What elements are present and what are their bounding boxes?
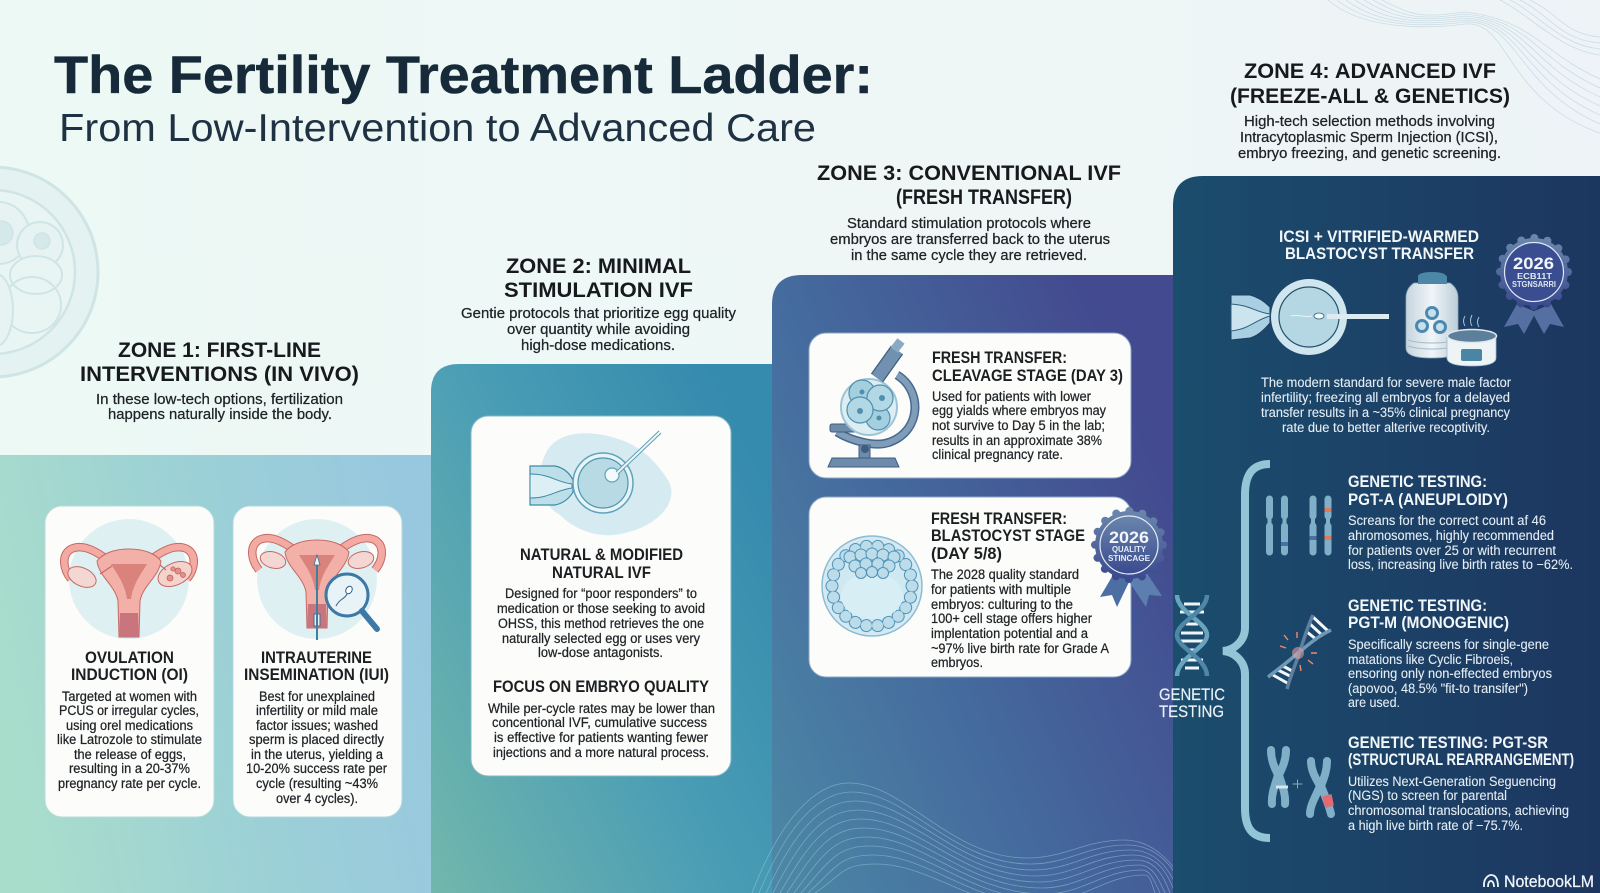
card text [931, 567, 1109, 670]
card text: embryos: culturing to the [931, 597, 1073, 612]
card text [497, 586, 705, 660]
block heading: ICSI transfer: BLASTOCYST TRANSFER [1285, 245, 1474, 263]
card heading: INSEMINATION (IUI) [244, 666, 389, 684]
icon: blastocyst [822, 536, 922, 636]
badge: 2026 standard: 2026 [1513, 254, 1554, 273]
icon: DNA helix [1177, 595, 1207, 676]
card text: naturally selected egg or uses very [502, 631, 700, 646]
panel: blastocyst stage card [809, 497, 1163, 677]
panel: cleavage stage card [809, 333, 1131, 478]
panel: zone 1 background [0, 455, 432, 893]
icon: cryo tank and warming bath [1406, 272, 1496, 366]
text block: PGT-A: PGT-A (ANEUPLOIDY) [1348, 491, 1508, 509]
icon: uterus with ovaries [64, 519, 196, 639]
sub-text: embryo quality: concentional IVF, cumulative success [492, 715, 707, 730]
decorative top-right wave lines [1328, 0, 1600, 133]
card text: resulting in a 20-37% [69, 761, 190, 776]
card text: infertility or mild male [256, 703, 378, 718]
card heading: BLASTOCYST STAGE [931, 527, 1085, 545]
text block: PGT-A: loss, increasing live birth rates to −62%. [1348, 557, 1573, 572]
card text [57, 689, 202, 791]
text block: PGT-M: matations like Cyclic Fibroeis, [1348, 652, 1513, 667]
zone 3 heading: embryos are transferred back to the uterus [830, 232, 1110, 248]
card heading: CLEAVAGE STAGE (DAY 3) [932, 367, 1123, 385]
text block: PGT-SR: chromosomal translocations, achieving [1348, 803, 1569, 818]
text block: PGT-M: ensoring only non-effected embryos [1348, 666, 1552, 681]
card text: Used for patients with lower [932, 389, 1091, 404]
zone 1 heading [80, 339, 359, 423]
zone 2 heading: over quantity while avoiding [507, 322, 690, 338]
card text [246, 689, 387, 806]
card heading [71, 649, 188, 684]
icon: PGT-A chromosomes [1270, 499, 1332, 552]
text block: PGT-SR: a high live birth rate of −75.7%. [1348, 818, 1523, 833]
zone 1 heading: INTERVENTIONS (IN VIVO) [80, 363, 359, 386]
badge: 2026 quality standard: STINCAGE [1108, 554, 1151, 563]
text block: PGT-M: GENETIC TESTING: [1348, 597, 1487, 615]
sub-text: embryo quality: While per-cycle rates may be lower than [488, 701, 715, 716]
icon: PGT-M mutated DNA [1268, 615, 1331, 689]
card text: in the uterus, yielding a [251, 747, 383, 762]
text block: PGT-A [1348, 473, 1573, 572]
icon: ICSI injection [1231, 279, 1389, 355]
icon: uterus with catheter and magnifier [252, 519, 382, 640]
icon: microscope with embryo [828, 341, 915, 467]
card heading: INTRAUTERINE [261, 649, 372, 667]
zone 3 heading: in the same cycle they are retrieved. [851, 248, 1087, 264]
card heading: NATURAL IVF [552, 564, 651, 582]
block heading: ICSI transfer: ICSI + VITRIFIED-WARMED [1279, 228, 1479, 246]
badge: 2026 quality standard [1095, 511, 1163, 607]
zone 4 heading: embryo freezing, and genetic screening. [1238, 146, 1501, 162]
text block: PGT-M [1348, 597, 1552, 710]
text block: ICSI description: rate due to better alterive recoptivity. [1282, 420, 1490, 435]
card text: PCUS or irregular cycles, [59, 703, 199, 718]
zone 2 heading: high-dose medications. [521, 338, 675, 354]
card text: clinical pregnancy rate. [932, 447, 1063, 462]
sub-text: embryo quality: is effective for patients wanting fewer [494, 730, 708, 745]
badge: 2026 standard [1500, 238, 1568, 334]
zone 4 heading: ZONE 4: ADVANCED IVF [1244, 60, 1496, 83]
zone 3 heading: (FRESH TRANSFER) [896, 186, 1072, 209]
title [54, 46, 873, 150]
zone 2 heading: Gentie protocols that prioritize egg quality [461, 306, 737, 322]
text block: PGT-A: for patients over 25 or with recurrent [1348, 543, 1556, 558]
panel: zone 2 background [431, 364, 773, 893]
zone 3 heading: ZONE 3: CONVENTIONAL IVF [817, 162, 1121, 185]
card heading: OVULATION [85, 649, 174, 667]
notebooklm logo: NotebookLM [1504, 873, 1594, 891]
decorative embryo illustration [0, 167, 98, 377]
text block: PGT-M: (apovoo, 48.5% "fit-to transifer") [1348, 681, 1528, 696]
card heading [244, 649, 389, 684]
card text: embryos. [931, 655, 983, 670]
panel: zone 4 background [1173, 176, 1600, 893]
card text: low-dose antagonists. [538, 645, 663, 660]
card text: Targeted at women with [62, 689, 197, 704]
card heading [520, 546, 683, 582]
card text: not survive to Day 5 in the lab; [932, 418, 1105, 433]
card text: ~97% live birth rate for Grade A [931, 641, 1109, 656]
zone 4 heading: (FREEZE-ALL & GENETICS) [1230, 85, 1510, 108]
card heading: FRESH TRANSFER: [932, 349, 1067, 367]
text block: PGT-M: PGT-M (MONOGENIC) [1348, 614, 1509, 632]
card text: 100+ cell stage offers higher [931, 611, 1092, 626]
card text: The 2028 quality standard [931, 567, 1079, 582]
label: genetic testing: TESTING [1159, 703, 1224, 721]
label: genetic testing: GENETIC [1159, 686, 1225, 704]
zone 3 heading: Standard stimulation protocols where [847, 216, 1091, 232]
sub-text: embryo quality: injections and a more natural process. [493, 745, 709, 760]
text block: PGT-SR: Utilizes Next-Generation Seguencing [1348, 774, 1556, 789]
card heading: NATURAL & MODIFIED [520, 546, 683, 564]
icon: egg retrieval [530, 432, 671, 535]
card text: 10-20% success rate per [246, 761, 387, 776]
card heading [932, 349, 1123, 385]
card text: like Latrozole to stimulate [57, 732, 202, 747]
block heading: ICSI transfer [1279, 228, 1479, 263]
sub-text: embryo quality [488, 701, 715, 760]
zone 1 heading: In these low-tech options, fertilization [96, 392, 343, 408]
text block: ICSI description: transfer results in a ~35% clinical pregnancy [1261, 405, 1510, 420]
panel: intrauterine insemination card [233, 506, 402, 817]
zone 2 heading: ZONE 2: MINIMAL [506, 255, 691, 278]
panel: natural IVF card [471, 416, 731, 776]
text block: PGT-A: GENETIC TESTING: [1348, 473, 1487, 491]
card heading: INDUCTION (OI) [71, 666, 188, 684]
zone 2 heading: STIMULATION IVF [504, 279, 693, 302]
text block: PGT-SR: (NGS) to screen for parental [1348, 788, 1507, 803]
panel: ovulation induction card [45, 506, 214, 817]
card text: using orel medications [66, 718, 193, 733]
text block: PGT-M: are used. [1348, 695, 1400, 710]
card text: Best for unexplained [259, 689, 375, 704]
badge: 2026 standard: STGNSARRI [1512, 280, 1556, 289]
card text: cycle (resulting ~43% [256, 776, 378, 791]
decorative wave lines in zone 3 [752, 783, 1190, 893]
zone 1 heading: happens naturally inside the body. [108, 407, 332, 423]
text block: ICSI description: infertility; freezing all embryos for a delayed [1261, 390, 1510, 405]
text block: PGT-A: ahromosomes, highly recommended [1348, 528, 1554, 543]
card text: factor issues; washed [256, 718, 378, 733]
card text: implentation potential and a [931, 626, 1088, 641]
card heading [931, 510, 1085, 563]
icon: PGT-SR chromosomes [1271, 750, 1333, 814]
card text: results in an approximate 38% [932, 433, 1102, 448]
card text: for patients with multiple [931, 582, 1071, 597]
zone 2 heading [461, 255, 737, 354]
card text: Designed for “poor responders” to [505, 586, 697, 601]
zone 1 heading: ZONE 1: FIRST-LINE [118, 339, 321, 362]
card text: medication or those seeking to avoid [497, 601, 705, 616]
text block: PGT-M: Specifically screens for single-gene [1348, 637, 1549, 652]
label: genetic testing [1159, 686, 1225, 721]
card text: OHSS, this method retrieves the one [498, 616, 704, 631]
sub-heading: focus on embryo quality: FOCUS ON EMBRYO QUALITY [493, 678, 709, 696]
text block: PGT-A: Screans for the correct count af 46 [1348, 513, 1546, 528]
zone 4 heading: Intracytoplasmic Sperm Injection (ICSI), [1240, 130, 1498, 146]
text block: ICSI description: The modern standard for severe male factor [1261, 375, 1511, 390]
bracket [1223, 464, 1270, 838]
card text: the release of eggs, [74, 747, 186, 762]
title: From Low-Intervention to Advanced Care [59, 107, 816, 150]
card text [932, 389, 1106, 462]
card text: egg yialds where embryos may [932, 403, 1106, 418]
badge: 2026 quality standard: QUALITY [1112, 545, 1147, 554]
title: The Fertility Treatment Ladder: [54, 46, 873, 105]
card text: pregnancy rate per cycle. [58, 776, 201, 791]
zone 4 heading: High-tech selection methods involving [1244, 114, 1495, 130]
card heading: (DAY 5/8) [931, 545, 1002, 563]
zone 3 heading [817, 162, 1121, 264]
text block: PGT-SR [1348, 734, 1574, 833]
text block: ICSI description [1261, 375, 1511, 435]
card heading: FRESH TRANSFER: [931, 510, 1067, 528]
card text: over 4 cycles). [276, 791, 358, 806]
card text: sperm is placed directly [249, 732, 384, 747]
zone 4 heading [1230, 60, 1510, 162]
badge: 2026 standard: ECB11T [1517, 272, 1552, 281]
panel: zone 3 background [772, 275, 1174, 893]
text block: PGT-SR: GENETIC TESTING: PGT-SR [1348, 734, 1548, 752]
badge: 2026 quality standard: 2026 [1109, 528, 1149, 547]
